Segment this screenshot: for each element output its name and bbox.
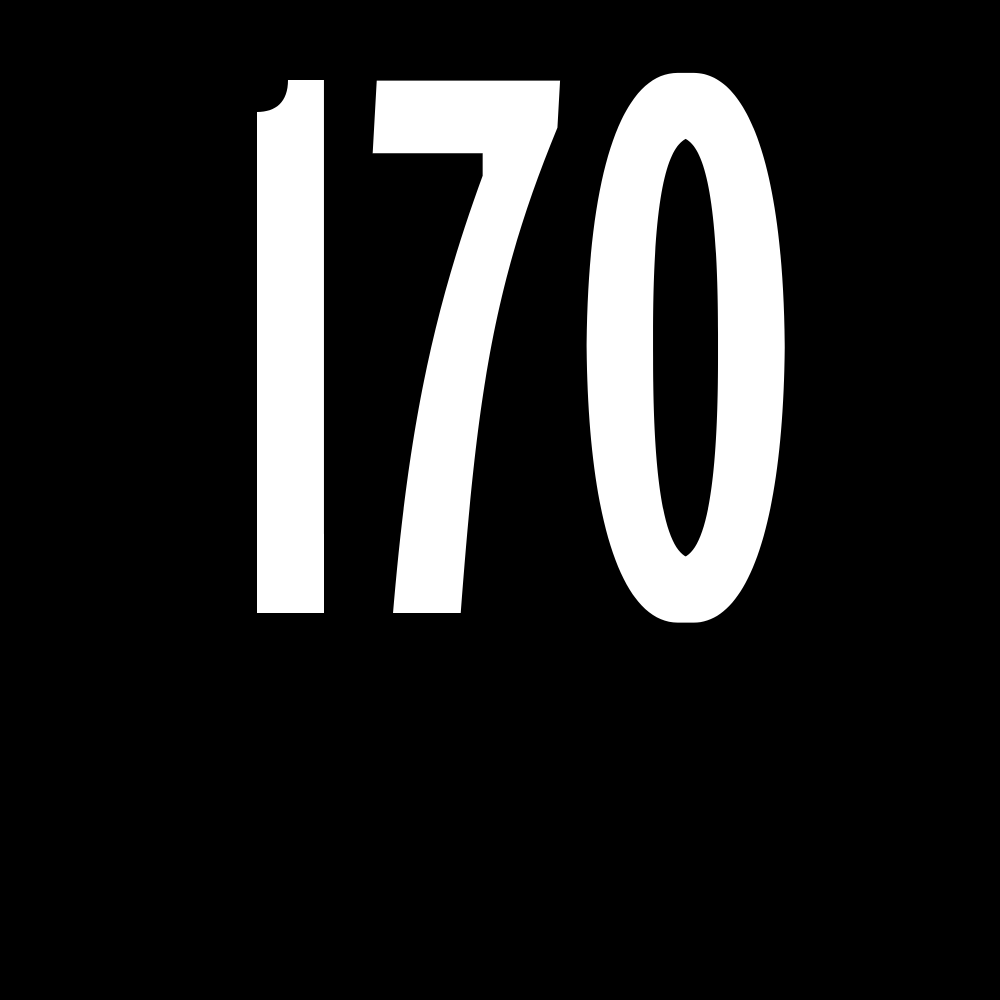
big number 170 (257, 72, 785, 623)
